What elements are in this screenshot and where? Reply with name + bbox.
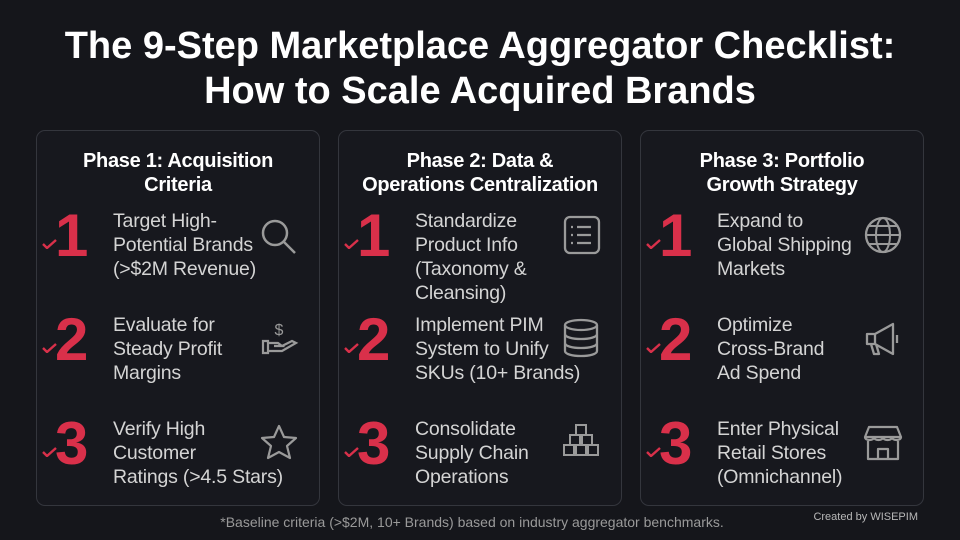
step 1.3: 3 [55,410,88,477]
panel: phase 1 [36,130,320,506]
step 1.3 [42,410,298,488]
panel: phase 3 [640,130,924,506]
step 2.1: 1 [357,202,390,269]
title [65,25,895,112]
step 2.2: 2 [357,306,390,373]
step 2.2 [344,306,598,384]
step 3.2 [646,306,898,384]
icon: database [564,318,598,358]
icon: store [864,426,902,460]
step 1.3: Ratings (>4.5 Stars) [113,466,283,488]
heading: phase 1: Criteria [144,174,212,196]
step 3.3 [646,410,902,488]
icon: hand with dollar [262,322,298,354]
heading: phase 3: Growth Strategy [706,174,858,196]
step 3.2: Optimize [717,314,792,336]
heading: phase 1: Phase 1: Acquisition [83,150,273,172]
step 2.1: Standardize [415,210,517,232]
icon: star [260,424,298,460]
step 1.2: Evaluate for [113,314,215,336]
icon: hand with dollar: $ [275,322,284,339]
icon: magnifier [262,220,296,254]
step 3.2: Cross-Brand [717,338,824,360]
step 3.3: 3 [659,410,692,477]
step 2.2: System to Unify [415,338,549,360]
icon: list [564,216,600,254]
heading: phase 2 [362,150,598,196]
step 2.3: Operations [415,466,508,488]
step 2.1 [344,202,600,304]
heading: phase 3 [700,150,864,196]
step 3.1: Markets [717,258,785,280]
title: The 9-Step Marketplace Aggregator Checklist: [65,25,895,67]
step 1.1: Target High- [113,210,217,232]
step 1.1: (>$2M Revenue) [113,258,256,280]
step 3.3: (Omnichannel) [717,466,842,488]
step 1.1: 1 [55,202,88,269]
step 2.3 [344,410,599,488]
step 1.1 [42,202,296,280]
step 1.2: Margins [113,362,181,384]
step 1.1: Potential Brands [113,234,253,256]
step 3.1: 1 [659,202,692,269]
icon: megaphone [866,322,898,356]
credit: Created by WISEPIM [813,511,918,523]
step 3.1 [646,202,902,280]
step 2.2: SKUs (10+ Brands) [415,362,580,384]
step 2.1: Cleansing) [415,282,506,304]
step 2.3: Supply Chain [415,442,529,464]
step 3.2: Ad Spend [717,362,801,384]
icon: globe [864,216,902,254]
step 1.2 [42,306,298,384]
heading: phase 1 [83,150,273,196]
step 3.1: Global Shipping [717,234,852,256]
step 2.1: Product Info [415,234,518,256]
panel: phase 2 [338,130,622,506]
step 2.1: (Taxonomy & [415,258,527,280]
step 1.3: Verify High [113,418,205,440]
icon: boxes [563,424,599,456]
step 3.3: Retail Stores [717,442,826,464]
heading: phase 2: Operations Centralization [362,174,598,196]
title: How to Scale Acquired Brands [204,70,756,112]
footnote: *Baseline criteria (>$2M, 10+ Brands) based on industry aggregator benchmarks. [220,514,724,530]
step 1.2: 2 [55,306,88,373]
step 2.2: Implement PIM [415,314,544,336]
step 3.1: Expand to [717,210,803,232]
step 2.3: Consolidate [415,418,516,440]
heading: phase 2: Phase 2: Data & [407,150,553,172]
step 1.3: Customer [113,442,196,464]
step 1.2: Steady Profit [113,338,222,360]
heading: phase 3: Phase 3: Portfolio [700,150,864,172]
step 3.2: 2 [659,306,692,373]
step 2.3: 3 [357,410,390,477]
step 3.3: Enter Physical [717,418,839,440]
